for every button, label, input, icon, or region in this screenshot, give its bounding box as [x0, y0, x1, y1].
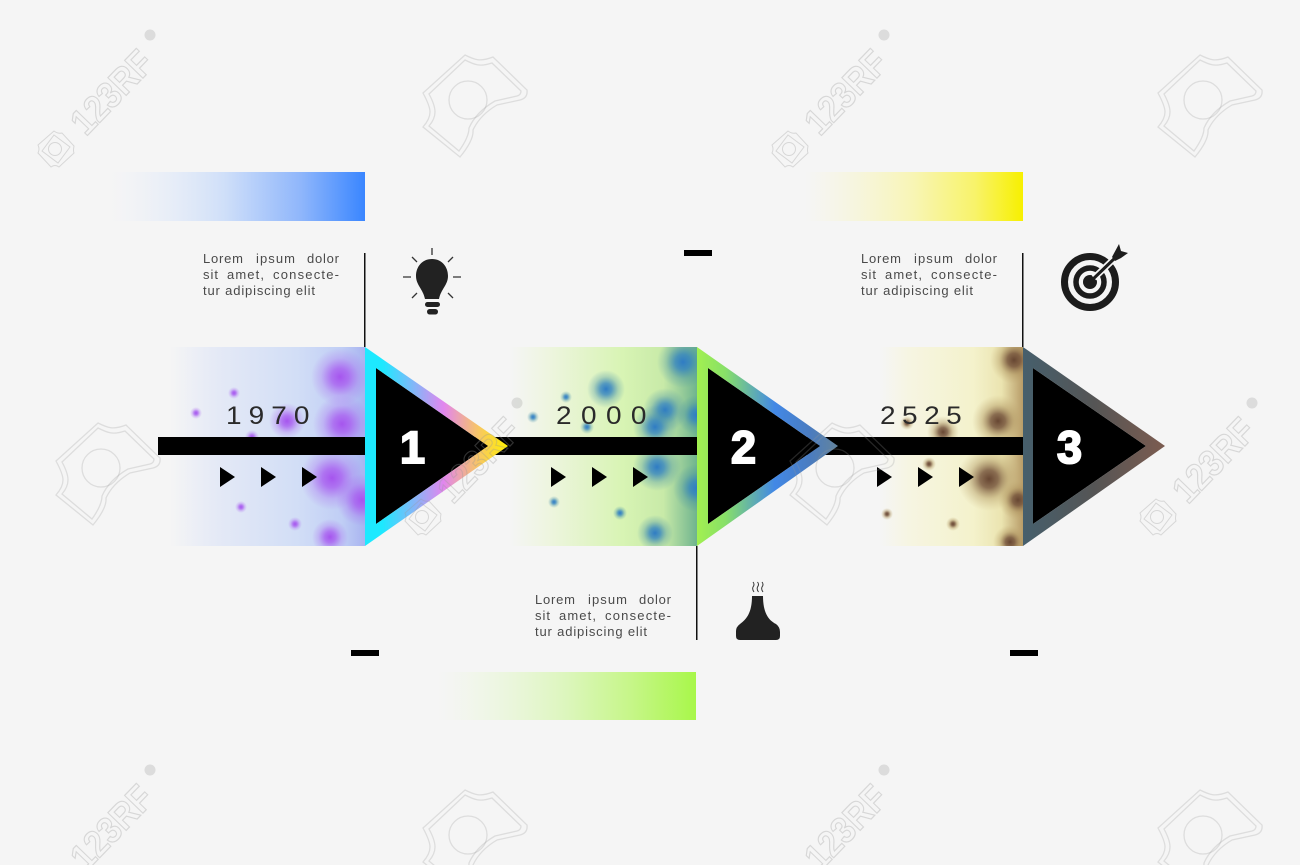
icon: target with dart — [1064, 244, 1128, 308]
top bar: blue gradient — [110, 172, 365, 221]
top bar: yellow gradient — [805, 172, 1023, 221]
panel: 2525 gradient with brown dots — [882, 347, 1023, 546]
arrow 2: 2 — [731, 422, 756, 473]
text block 2 — [535, 592, 672, 639]
text block 2: consecte- — [605, 608, 671, 623]
dash marker right — [1010, 650, 1038, 656]
text block 1: Lorem — [203, 251, 243, 266]
panel: 1970 gradient with purple dots — [190, 347, 365, 546]
year 2000: 2000 — [556, 401, 656, 430]
text block 1: consecte- — [273, 267, 339, 282]
arrow 3: 3 — [1057, 422, 1082, 473]
text block 1: tur adipiscing elit — [203, 283, 315, 298]
text block 2: Lorem — [535, 592, 575, 607]
text block 3: sit — [861, 267, 876, 282]
text block 2: ipsum — [588, 592, 627, 607]
connector line 1 — [364, 253, 366, 347]
connector line 2 — [696, 546, 698, 640]
icon: light bulb — [403, 248, 461, 314]
timeline bar — [158, 437, 1028, 455]
small arrows: panel 3 — [877, 467, 974, 487]
panel: 2000 gradient with blue dots — [524, 347, 697, 546]
text block 3: Lorem — [861, 251, 901, 266]
watermark: 123RF marks: 123RF — [796, 42, 895, 143]
watermark: 123RF marks: 123RF — [62, 42, 161, 143]
arrow 1 — [365, 347, 508, 546]
bottom bar: green gradient — [438, 672, 696, 720]
text block 1: sit — [203, 267, 218, 282]
small arrows: panel 1 — [220, 467, 317, 487]
text block 2: tur adipiscing elit — [535, 624, 647, 639]
connector line 3 — [1022, 253, 1024, 347]
text block 2: amet, — [559, 608, 596, 623]
text block 3: tur adipiscing elit — [861, 283, 973, 298]
arrow 1: 1 — [400, 422, 425, 473]
text block 2: dolor — [639, 592, 672, 607]
text block 1: amet, — [227, 267, 264, 282]
text block 3: consecte- — [931, 267, 997, 282]
year 2525: 2525 — [880, 401, 968, 430]
small arrows: panel 2 — [551, 467, 648, 487]
text block 3: amet, — [885, 267, 922, 282]
text block 1 — [203, 251, 340, 298]
icon: flask — [736, 582, 780, 640]
year 1970: 1970 — [226, 401, 316, 430]
text block 3: dolor — [965, 251, 998, 266]
text block 3 — [861, 251, 998, 298]
text block 1: ipsum — [256, 251, 295, 266]
watermark: 123RF marks: 123RF — [429, 410, 528, 511]
dash marker left — [351, 650, 379, 656]
text block 1: dolor — [307, 251, 340, 266]
text block 2: sit — [535, 608, 550, 623]
watermark: 123RF marks: 123RF — [1164, 410, 1263, 511]
arrow 3 — [1023, 347, 1165, 546]
arrow 2 — [697, 347, 838, 546]
text block 3: ipsum — [914, 251, 953, 266]
dash marker top — [684, 250, 712, 256]
